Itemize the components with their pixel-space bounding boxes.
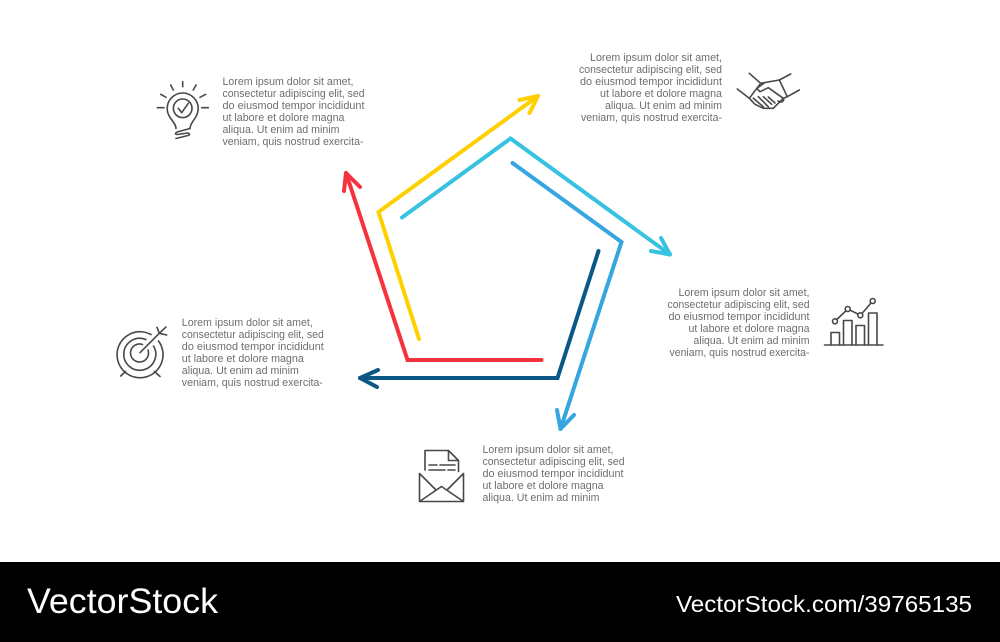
text block: idea: veniam, quis nostrud exercita- — [222, 136, 364, 148]
icon: target with arrow — [117, 327, 167, 378]
text block: target: do eiusmod tempor incididunt — [182, 341, 324, 353]
arrow: yellow — [378, 96, 538, 339]
icon: envelope with letter — [420, 450, 464, 502]
icon: bar chart — [824, 298, 883, 345]
icon: light bulb — [157, 82, 208, 138]
text block: mail: Lorem ipsum dolor sit amet, — [482, 444, 614, 456]
panel: growth — [668, 287, 883, 359]
text block: idea: do eiusmod tempor incididunt — [222, 100, 365, 112]
text block: mail: aliqua. Ut enim ad minim — [482, 492, 600, 504]
text block: partnership — [579, 52, 722, 124]
text block: idea: consectetur adipiscing elit, sed — [222, 88, 365, 100]
panel: mail — [420, 444, 625, 504]
text block: growth — [668, 287, 810, 359]
text block: growth: aliqua. Ut enim ad minim — [694, 335, 810, 347]
text block: idea: Lorem ipsum dolor sit amet, — [222, 76, 354, 88]
pentagon arrow diagram — [344, 96, 670, 429]
text block: target: aliqua. Ut enim ad minim — [182, 365, 299, 377]
text block: mail: ut labore et dolore magna — [482, 480, 604, 492]
text block: growth: do eiusmod tempor incididunt — [668, 311, 810, 323]
text block: target: ut labore et dolore magna — [182, 353, 304, 365]
text block: target: Lorem ipsum dolor sit amet, — [182, 317, 313, 329]
text block: target: veniam, quis nostrud exercita- — [182, 377, 323, 389]
text block: growth: veniam, quis nostrud exercita- — [670, 347, 810, 359]
panel: partnership — [579, 52, 799, 124]
footer image id: VectorStock.com/39765135 — [676, 591, 972, 617]
text block: idea: ut labore et dolore magna — [222, 112, 345, 124]
arrow: red — [344, 173, 542, 360]
panel: idea — [157, 76, 365, 148]
footer logo text: VectorStock — [27, 582, 219, 621]
text block: growth: Lorem ipsum dolor sit amet, — [678, 287, 810, 299]
text block: partnership: Lorem ipsum dolor sit amet, — [590, 52, 722, 64]
text block: mail — [482, 444, 625, 504]
text block: target: consectetur adipiscing elit, sed — [182, 329, 324, 341]
text block: partnership: do eiusmod tempor incididunt — [580, 76, 722, 88]
footer band — [0, 562, 1000, 642]
text block: idea: aliqua. Ut enim ad minim — [222, 124, 340, 136]
text block: partnership: aliqua. Ut enim ad minim — [605, 100, 722, 112]
text block: partnership: consectetur adipiscing elit, sed — [579, 64, 722, 76]
text block: mail: do eiusmod tempor incididunt — [482, 468, 624, 480]
text block: partnership: veniam, quis nostrud exercita- — [581, 112, 722, 124]
text block: growth: ut labore et dolore magna — [688, 323, 810, 335]
text block: target — [182, 317, 324, 389]
icon: handshake — [737, 73, 799, 108]
text block: idea — [222, 76, 365, 148]
text block: growth: consectetur adipiscing elit, sed — [668, 299, 810, 311]
text block: partnership: ut labore et dolore magna — [600, 88, 722, 100]
panel: target — [117, 317, 324, 389]
text block: mail: consectetur adipiscing elit, sed — [482, 456, 625, 468]
arrow: cyan — [402, 138, 670, 254]
arrow: dark blue — [360, 251, 598, 387]
arrow: blue — [512, 163, 622, 429]
